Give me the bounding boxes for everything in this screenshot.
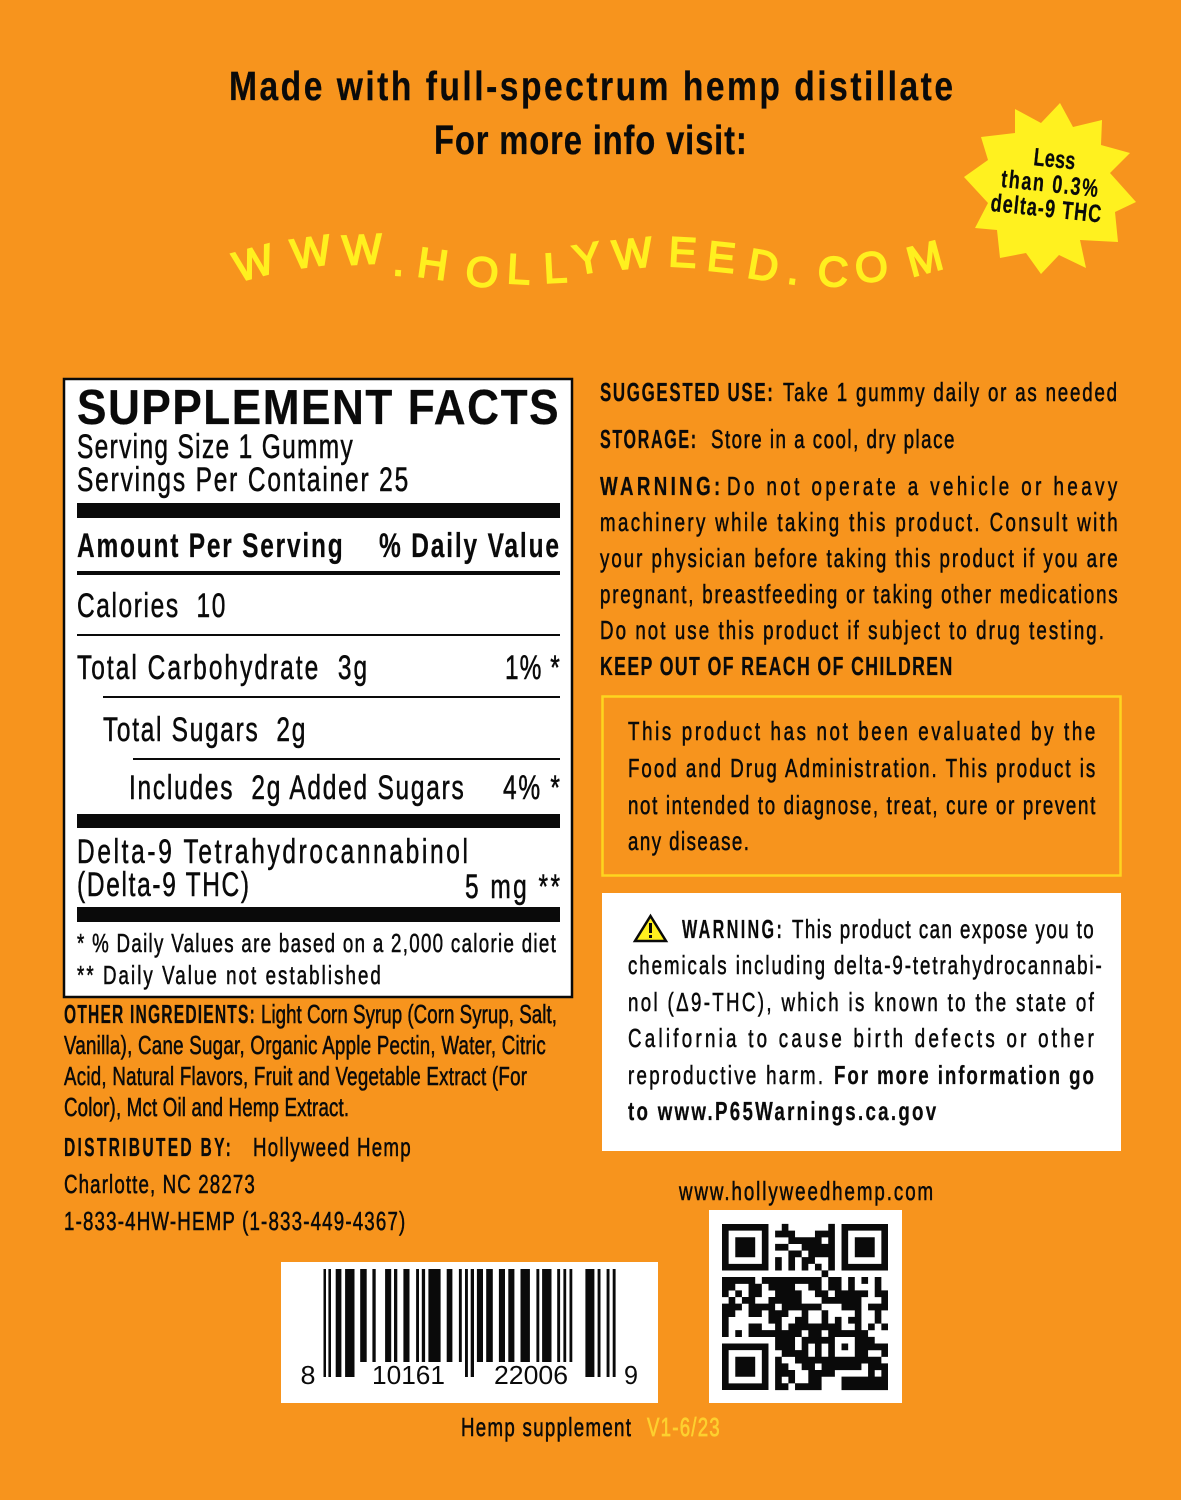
warning text: machinery while taking this product. Consult with: [600, 507, 1118, 537]
other ingredients: OTHER INGREDIENTS:: [64, 1000, 255, 1029]
column headings: % Daily Value: [379, 527, 559, 565]
website url above QR: www.hollyweedhemp.com: [678, 1176, 933, 1206]
icon: warning triangle: [635, 916, 666, 941]
distributor details: Hollyweed Hemp: [253, 1132, 411, 1162]
suggested use and storage: Store in a cool, dry place: [711, 424, 954, 454]
footnotes: ** Daily Value not established: [77, 960, 381, 990]
column headings: Amount Per Serving: [77, 527, 343, 565]
warning text: Do not operate a vehicle or heavy: [727, 471, 1118, 501]
panel: Prop 65 warning: For more information go: [834, 1060, 1094, 1090]
row: added sugars: 4% *: [503, 769, 560, 807]
panel: Prop 65 warning: California to cause birth defects or other: [628, 1023, 1094, 1053]
row: total carbohydrate: 1% *: [505, 649, 560, 687]
suggested use and storage: [600, 377, 1117, 454]
suggested use and storage: Take 1 gummy daily or as needed: [783, 377, 1117, 407]
barcode: [281, 1262, 658, 1403]
distributor details: DISTRIBUTED BY:: [64, 1133, 231, 1162]
serving information: Servings Per Container 25: [77, 461, 408, 499]
QR code: [709, 1210, 902, 1403]
warning text: pregnant, breastfeeding or taking other medications: [600, 579, 1118, 609]
barcode: 9: [624, 1360, 638, 1390]
badge: less than 0.3% delta-9 THC: Less: [1032, 142, 1077, 175]
distributor details: [64, 1132, 411, 1236]
other ingredients: Vanilla), Cane Sugar, Organic Apple Pectin, Water, Citric: [64, 1030, 546, 1060]
other ingredients: Color), Mct Oil and Hemp Extract.: [64, 1092, 349, 1122]
supplement facts title: SUPPLEMENT FACTS: [77, 380, 559, 435]
heading: full-spectrum statement: [229, 63, 953, 163]
other ingredients: [64, 999, 557, 1122]
column headings: [77, 527, 559, 565]
panel: FDA disclaimer: any disease.: [628, 826, 749, 856]
suggested use and storage: SUGGESTED USE:: [600, 377, 773, 407]
panel: Prop 65 warning: WARNING:: [682, 914, 782, 944]
curved website address: WWW.HOLLYWEED.COM: [228, 225, 948, 297]
serving information: Serving Size 1 Gummy: [77, 428, 353, 466]
panel: FDA disclaimer: This product has not been evaluated by the: [628, 716, 1095, 746]
row: delta-9 THC: (Delta-9 THC): [77, 866, 249, 904]
panel: Prop 65 warning: chemicals including delta-9-tetrahydrocannabi-: [628, 950, 1102, 980]
barcode: 10161: [372, 1360, 445, 1390]
row: calories: Calories 10: [77, 587, 225, 625]
barcode: 8: [300, 1360, 316, 1390]
badge: less than 0.3% delta-9 THC: than 0.3%: [1000, 164, 1100, 203]
row: delta-9 THC: Delta-9 Tetrahydrocannabinol: [77, 833, 468, 871]
footnotes: * % Daily Values are based on a 2,000 calorie diet: [77, 928, 556, 958]
badge: less than 0.3% delta-9 THC: delta-9 THC: [989, 188, 1103, 228]
row: added sugars: Includes 2g Added Sugars: [129, 769, 464, 807]
row: total sugars: Total Sugars 2g: [103, 711, 305, 749]
panel: FDA disclaimer: not intended to diagnose, treat, cure or prevent: [628, 790, 1096, 820]
panel: Prop 65 warning: This product can expose you to: [792, 914, 1094, 944]
panel: FDA disclaimer: [602, 696, 1120, 876]
heading: full-spectrum statement: For more info visit:: [434, 116, 747, 163]
warning text: KEEP OUT OF REACH OF CHILDREN: [600, 652, 952, 681]
heading: full-spectrum statement: Made with full-spectrum hemp distillate: [229, 63, 953, 109]
distributor details: Charlotte, NC 28273: [64, 1169, 255, 1199]
warning text: [600, 471, 1118, 681]
panel: Prop 65 warning: nol (Δ9-THC), which is known to the state of: [628, 987, 1094, 1017]
other ingredients: Light Corn Syrup (Corn Syrup, Salt,: [261, 999, 557, 1029]
panel: Prop 65 warning: [602, 893, 1121, 1151]
other ingredients: Acid, Natural Flavors, Fruit and Vegetable Extract (For: [64, 1061, 527, 1091]
badge: less than 0.3% delta-9 THC: [964, 103, 1136, 274]
footer: product type: Hemp supplement: [461, 1412, 632, 1442]
row: delta-9 THC: [77, 833, 560, 906]
panel: supplement facts: [64, 379, 572, 997]
panel: FDA disclaimer: Food and Drug Administration. This product is: [628, 753, 1095, 783]
row: total carbohydrate: Total Carbohydrate 3g: [77, 649, 367, 687]
footer: version: V1-6/23: [647, 1412, 720, 1442]
warning text: Do not use this product if subject to drug testing.: [600, 615, 1104, 645]
suggested use and storage: STORAGE:: [600, 424, 696, 454]
panel: Prop 65 warning: reproductive harm.: [628, 1060, 823, 1090]
serving information: [77, 428, 408, 499]
warning text: WARNING:: [600, 471, 720, 501]
row: total carbohydrate: [77, 649, 560, 687]
warning text: your physician before taking this product if you are: [600, 543, 1118, 573]
barcode: 22006: [494, 1360, 568, 1390]
footnotes: [77, 928, 556, 990]
distributor details: 1-833-4HW-HEMP (1-833-449-4367): [64, 1206, 405, 1236]
row: delta-9 THC: 5 mg **: [465, 868, 560, 906]
panel: Prop 65 warning: to www.P65Warnings.ca.gov: [628, 1096, 936, 1126]
